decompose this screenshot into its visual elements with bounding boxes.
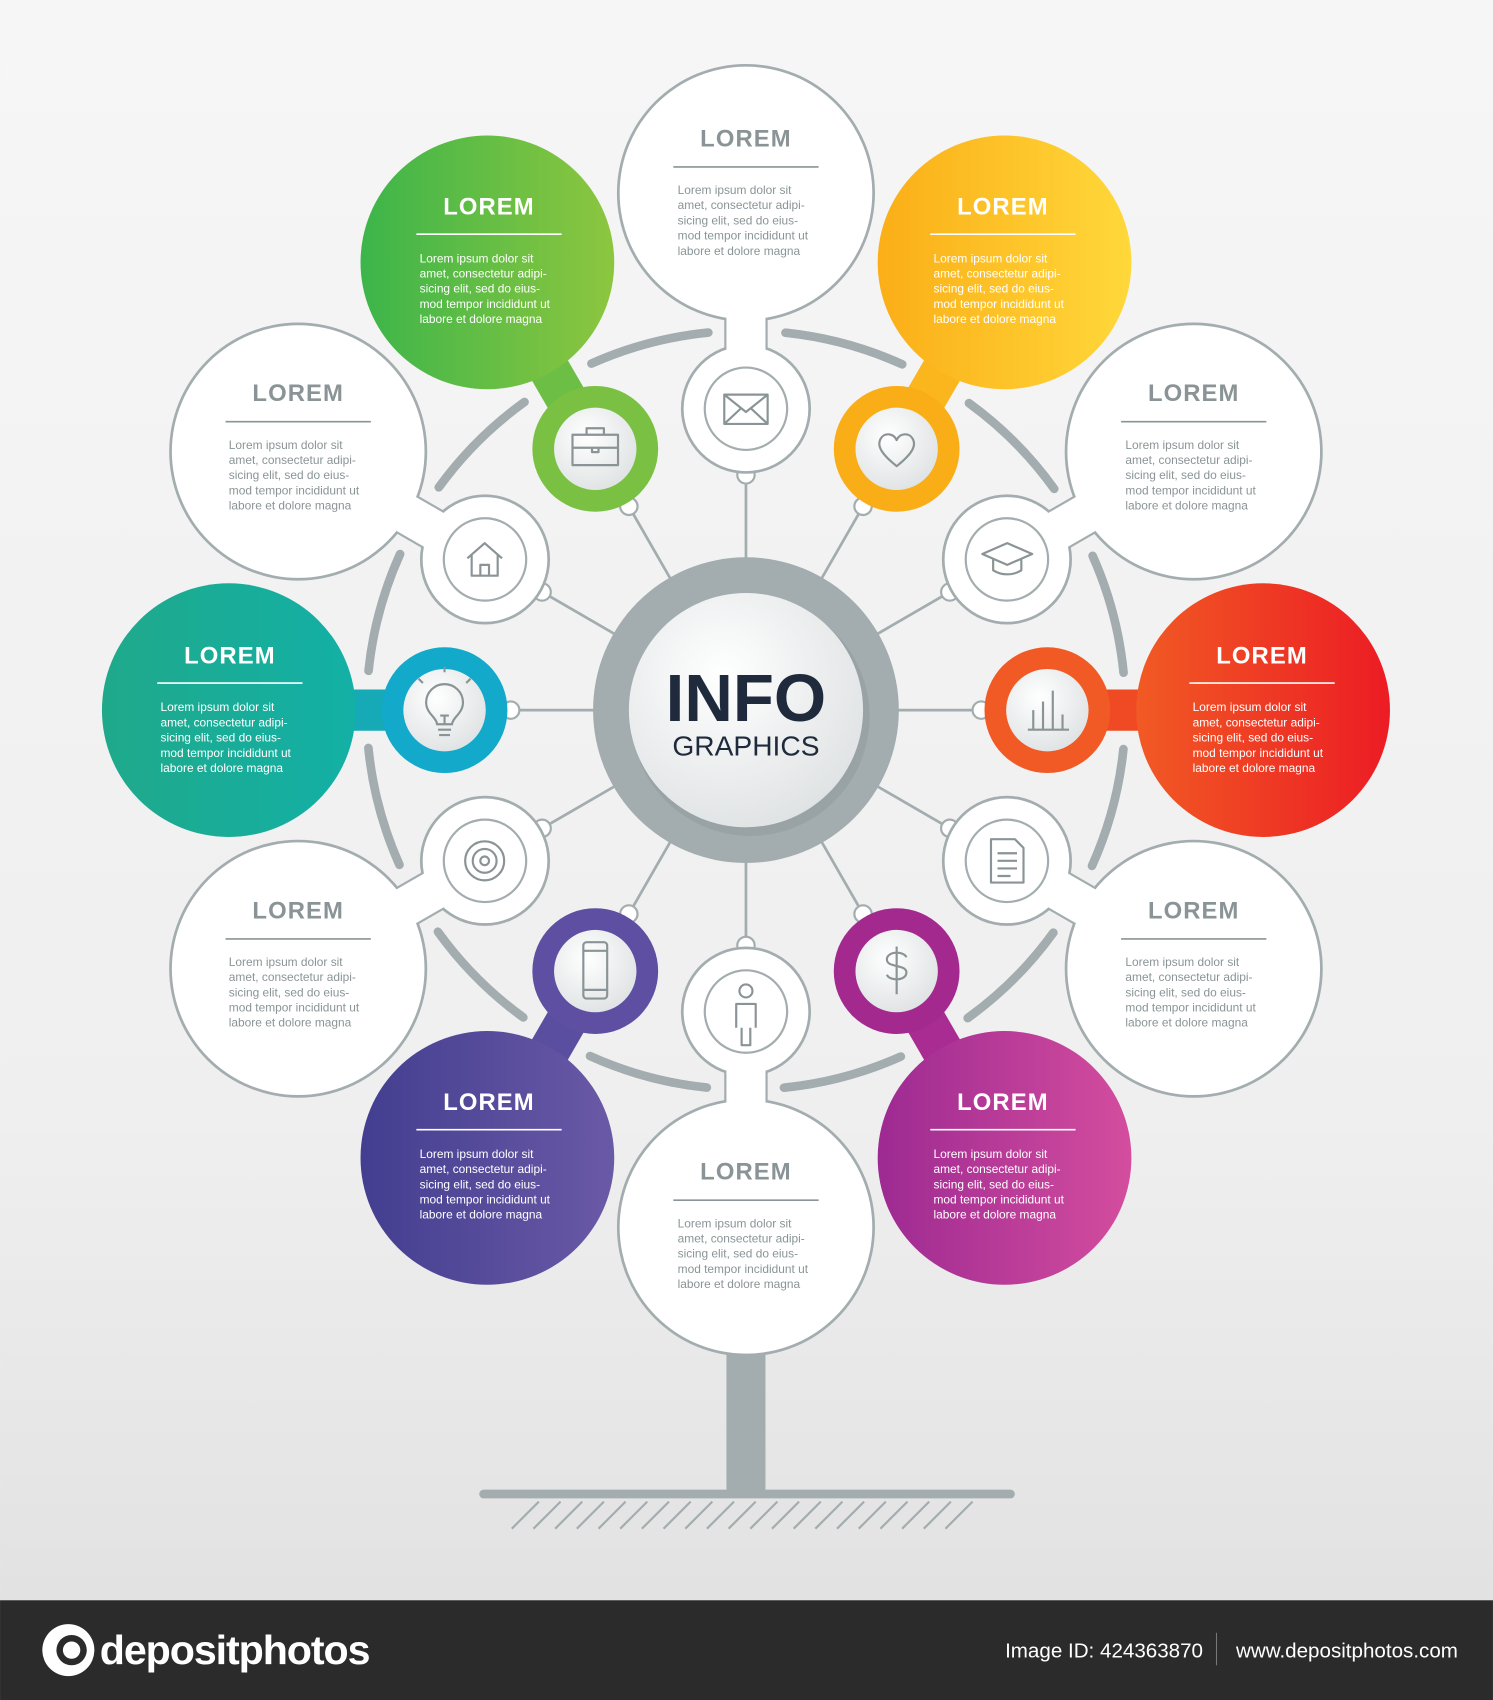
colored node: green [361,136,658,512]
text: red [1189,643,1335,775]
text: green: sicing elit, sed do eius- [420,282,540,296]
text: bottom-right white: Lorem ipsum dolor sit [1125,955,1240,969]
text: green: amet, consectetur adipi- [420,267,547,281]
text: top-right white: labore et dolore magna [1125,499,1248,513]
trunk [484,1342,1010,1529]
text: yellow: Lorem ipsum dolor sit [934,251,1048,265]
text: red: mod tempor incididunt ut [1193,746,1324,760]
icon: wifi [465,841,504,880]
icon: document [991,839,1024,883]
text: green: mod tempor incididunt ut [420,297,551,311]
footer bar: depositphotos [100,1627,370,1673]
text: red: labore et dolore magna [1193,761,1315,775]
text: purple: sicing elit, sed do eius- [420,1177,540,1191]
text: green: Lorem ipsum dolor sit [420,251,534,265]
text: magenta: labore et dolore magna [934,1208,1056,1222]
white nodes outlines [169,64,1323,1356]
text: top-left white: Lorem ipsum dolor sit [229,438,343,452]
text: bottom-left white: Lorem ipsum dolor sit [229,955,343,969]
text: purple: amet, consectetur adipi- [420,1162,547,1176]
text: top white: sicing elit, sed do eius- [678,213,798,227]
colored node: purple [361,908,658,1285]
icons [419,395,1069,1045]
text: magenta: mod tempor incididunt ut [934,1192,1065,1206]
text: top-left white: sicing elit, sed do eius- [229,468,349,482]
text: yellow: LOREM [957,194,1049,221]
text: bottom white: sicing elit, sed do eius- [678,1247,798,1261]
text: bottom white: amet, consectetur adipi- [678,1231,805,1245]
text: bottom-right white: LOREM [1148,897,1239,924]
text: green: LOREM [443,194,535,221]
text: red: Lorem ipsum dolor sit [1193,700,1307,714]
icon: graduation cap [982,543,1032,574]
icon: bulb [419,667,471,735]
text: top-right white: amet, consectetur adipi- [1125,453,1253,467]
text: magenta [930,1089,1076,1222]
text: top white: Lorem ipsum dolor sit [678,183,792,197]
text: bottom-right white: amet, consectetur adipi- [1125,970,1253,984]
text: bottom-left white: mod tempor incididunt ut [229,1001,360,1015]
text: yellow: mod tempor incididunt ut [934,297,1065,311]
text: top-right white: LOREM [1148,380,1239,407]
icon: envelope [724,395,768,424]
text: teal: amet, consectetur adipi- [160,715,288,729]
text: magenta: Lorem ipsum dolor sit [934,1147,1048,1161]
text: red: amet, consectetur adipi- [1193,715,1320,729]
icon: person [736,984,756,1045]
center hub: GRAPHICS [672,730,820,762]
text: green [416,194,562,326]
text: top-right white [1121,380,1266,513]
footer bar: Image ID: 424363870 [1005,1640,1203,1663]
colored node: teal [102,583,507,837]
text: red: LOREM [1216,643,1308,670]
text: bottom-left white: LOREM [252,897,344,924]
colored node: red [984,583,1390,837]
text: top white: amet, consectetur adipi- [678,198,805,212]
text: bottom-right white [1121,897,1266,1030]
text: top-right white: sicing elit, sed do eius- [1125,468,1246,482]
text: purple: LOREM [443,1089,535,1116]
text: purple: mod tempor incididunt ut [420,1192,551,1206]
text: red: sicing elit, sed do eius- [1193,731,1313,745]
text: bottom white: Lorem ipsum dolor sit [678,1216,792,1230]
text: purple: Lorem ipsum dolor sit [420,1147,534,1161]
text: bottom-left white [226,897,371,1030]
icon: heart [879,434,914,466]
text: teal: sicing elit, sed do eius- [160,731,281,745]
center hub: INFO [666,661,826,736]
text: top white: mod tempor incididunt ut [678,229,809,243]
center hub [593,557,899,863]
text: bottom white: labore et dolore magna [678,1277,800,1291]
text: green: labore et dolore magna [420,312,542,326]
text: top white [673,125,819,258]
colored node: magenta [834,908,1131,1285]
text: bottom-right white: sicing elit, sed do eius- [1125,985,1246,999]
text: yellow [930,194,1076,326]
text: teal: mod tempor incididunt ut [160,746,292,760]
icon: bar chart [1028,691,1069,730]
text: top-left white: labore et dolore magna [229,499,352,513]
icon: briefcase [572,428,618,465]
text: teal: labore et dolore magna [160,761,283,775]
text: top-right white: Lorem ipsum dolor sit [1125,438,1240,452]
text: bottom white: LOREM [700,1159,792,1186]
text: top white: LOREM [700,125,792,152]
text: yellow: sicing elit, sed do eius- [934,282,1054,296]
text: bottom-left white: amet, consectetur adipi- [229,970,356,984]
text: magenta: sicing elit, sed do eius- [934,1177,1054,1191]
text: purple [416,1089,562,1222]
text: teal: Lorem ipsum dolor sit [160,700,275,714]
text: magenta: amet, consectetur adipi- [934,1162,1061,1176]
text: bottom white [673,1159,819,1291]
icon: house [467,543,502,576]
footer bar: www.depositphotos.com [1235,1640,1458,1663]
text: bottom white: mod tempor incididunt ut [678,1262,809,1276]
gray arcs [366,331,1125,1090]
text: yellow: labore et dolore magna [934,312,1056,326]
text: bottom-right white: mod tempor incididunt ut [1125,1001,1256,1015]
colored node: yellow [834,136,1131,512]
text: top-left white: amet, consectetur adipi- [229,453,356,467]
text: yellow: amet, consectetur adipi- [934,267,1061,281]
text: purple: labore et dolore magna [420,1208,542,1222]
spokes [511,475,981,945]
spoke knobs [502,466,990,954]
text: top-left white: mod tempor incididunt ut [229,483,360,497]
text: top white: labore et dolore magna [678,244,800,258]
text: top-left white [226,380,371,513]
icon: phone [583,942,607,999]
text: bottom-left white: labore et dolore magna [229,1016,352,1030]
text: teal: LOREM [184,643,276,670]
text: teal [157,643,303,775]
text: top-right white: mod tempor incididunt ut [1125,483,1256,497]
text: bottom-left white: sicing elit, sed do eius- [229,985,349,999]
icon: dollar [887,946,906,994]
text: bottom-right white: labore et dolore magna [1125,1016,1248,1030]
text: magenta: LOREM [957,1089,1049,1116]
footer bar [0,1600,1493,1700]
text: top-left white: LOREM [252,380,344,407]
